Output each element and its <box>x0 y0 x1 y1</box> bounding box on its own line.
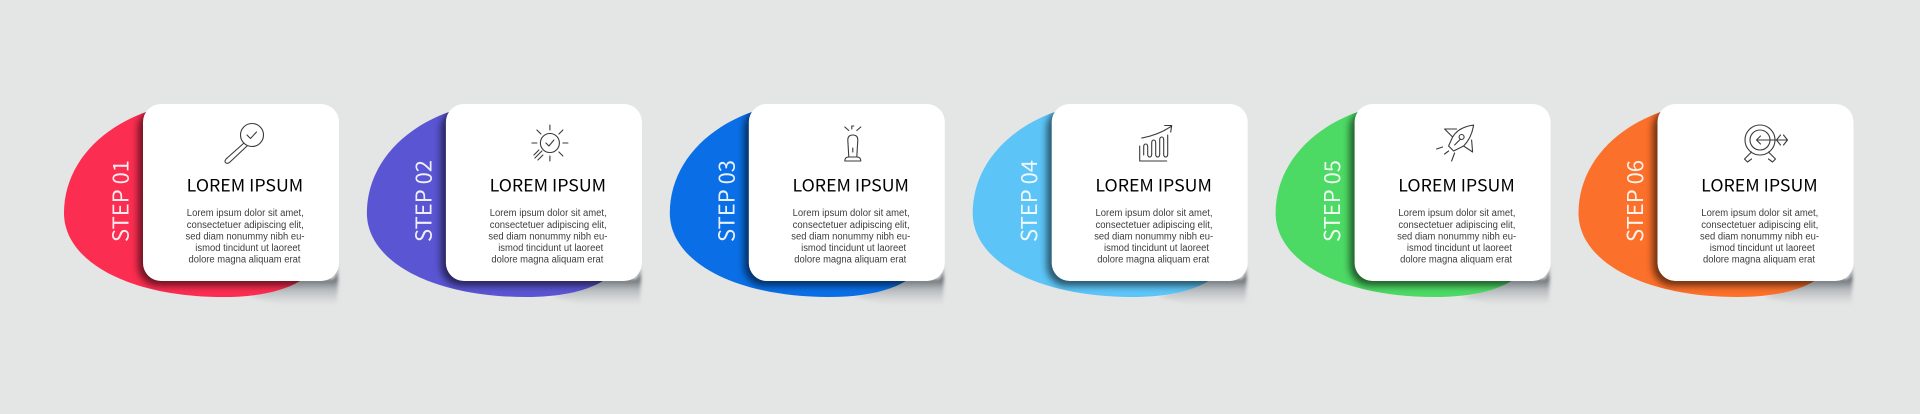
panel: step 05 <box>1276 104 1551 305</box>
body text <box>488 208 607 266</box>
panel: step 03 <box>670 104 945 305</box>
blob: step 06 orange <box>1578 112 1814 297</box>
card <box>1658 104 1854 281</box>
blob: step 01 red <box>64 112 300 297</box>
panel: step 04 <box>973 104 1248 305</box>
blob: step 05 green <box>1276 112 1512 297</box>
body text <box>186 208 304 266</box>
card <box>1355 104 1551 281</box>
body text: sed diam nonummy nibh eu- <box>791 232 910 242</box>
body text <box>791 208 910 266</box>
body text: ismod tincidunt ut laoreet <box>195 243 301 254</box>
icon: rocket <box>1437 125 1474 161</box>
body text: ismod tincidunt ut laoreet <box>498 243 603 254</box>
icon: target with arrow <box>1744 125 1788 162</box>
panel: step 06 <box>1578 104 1854 305</box>
body text <box>1094 208 1213 266</box>
body text: Lorem ipsum dolor sit amet, <box>1701 208 1818 219</box>
body text: dolore magna aliquam erat <box>1703 254 1815 266</box>
body text: ismod tincidunt ut laoreet <box>801 243 906 254</box>
icon: magnifier <box>225 124 264 163</box>
body text: consectetuer adipiscing elit, <box>490 220 607 231</box>
blob: step 04 light blue <box>973 112 1209 297</box>
body text: dolore magna aliquam erat <box>188 254 301 266</box>
body text: dolore magna aliquam erat <box>491 254 604 266</box>
card <box>1052 104 1248 281</box>
body text: dolore magna aliquam erat <box>1400 254 1512 266</box>
body text: Lorem ipsum dolor sit amet, <box>490 208 607 219</box>
heading: LOREM IPSUM <box>490 172 606 196</box>
body text: sed diam nonummy nibh eu- <box>1700 232 1819 242</box>
body text: Lorem ipsum dolor sit amet, <box>187 208 304 219</box>
body text: Lorem ipsum dolor sit amet, <box>793 208 910 219</box>
icon: sun with check <box>532 125 568 161</box>
step label: STEP 06 <box>1619 160 1650 242</box>
body text: consectetuer adipiscing elit, <box>1701 220 1818 231</box>
blob: step 02 purple <box>367 112 603 297</box>
body text: ismod tincidunt ut laoreet <box>1104 243 1209 254</box>
panel: step 02 <box>367 104 642 305</box>
step label: STEP 04 <box>1013 160 1044 242</box>
card <box>446 104 642 281</box>
heading: LOREM IPSUM <box>1701 172 1818 196</box>
step label: STEP 03 <box>710 160 741 242</box>
step label: STEP 01 <box>104 160 136 242</box>
heading: LOREM IPSUM <box>187 172 303 196</box>
body text: dolore magna aliquam erat <box>794 254 907 266</box>
body text: Lorem ipsum dolor sit amet, <box>1398 208 1515 219</box>
body text: consectetuer adipiscing elit, <box>793 220 910 231</box>
body text: consectetuer adipiscing elit, <box>1398 220 1515 231</box>
body text: dolore magna aliquam erat <box>1097 254 1209 266</box>
icon: beacon <box>845 126 861 161</box>
card <box>749 104 945 281</box>
body text: ismod tincidunt ut laoreet <box>1710 243 1815 254</box>
card <box>143 104 339 281</box>
blob: step 03 blue <box>670 112 906 297</box>
body text: sed diam nonummy nibh eu- <box>1094 232 1213 242</box>
panel: step 01 <box>64 104 339 305</box>
body text <box>1397 208 1516 266</box>
body text: sed diam nonummy nibh eu- <box>488 232 607 242</box>
body text: consectetuer adipiscing elit, <box>187 220 304 231</box>
step label: STEP 02 <box>407 160 438 242</box>
heading: LOREM IPSUM <box>1095 172 1212 196</box>
body text: ismod tincidunt ut laoreet <box>1407 243 1512 254</box>
body text <box>1700 208 1819 266</box>
step label: STEP 05 <box>1316 160 1347 242</box>
body text: sed diam nonummy nibh eu- <box>186 232 304 242</box>
heading: LOREM IPSUM <box>792 172 909 196</box>
body text: sed diam nonummy nibh eu- <box>1397 232 1516 242</box>
heading: LOREM IPSUM <box>1398 172 1515 196</box>
body text: Lorem ipsum dolor sit amet, <box>1096 208 1213 219</box>
icon: growth chart <box>1140 126 1172 161</box>
body text: consectetuer adipiscing elit, <box>1096 220 1213 231</box>
